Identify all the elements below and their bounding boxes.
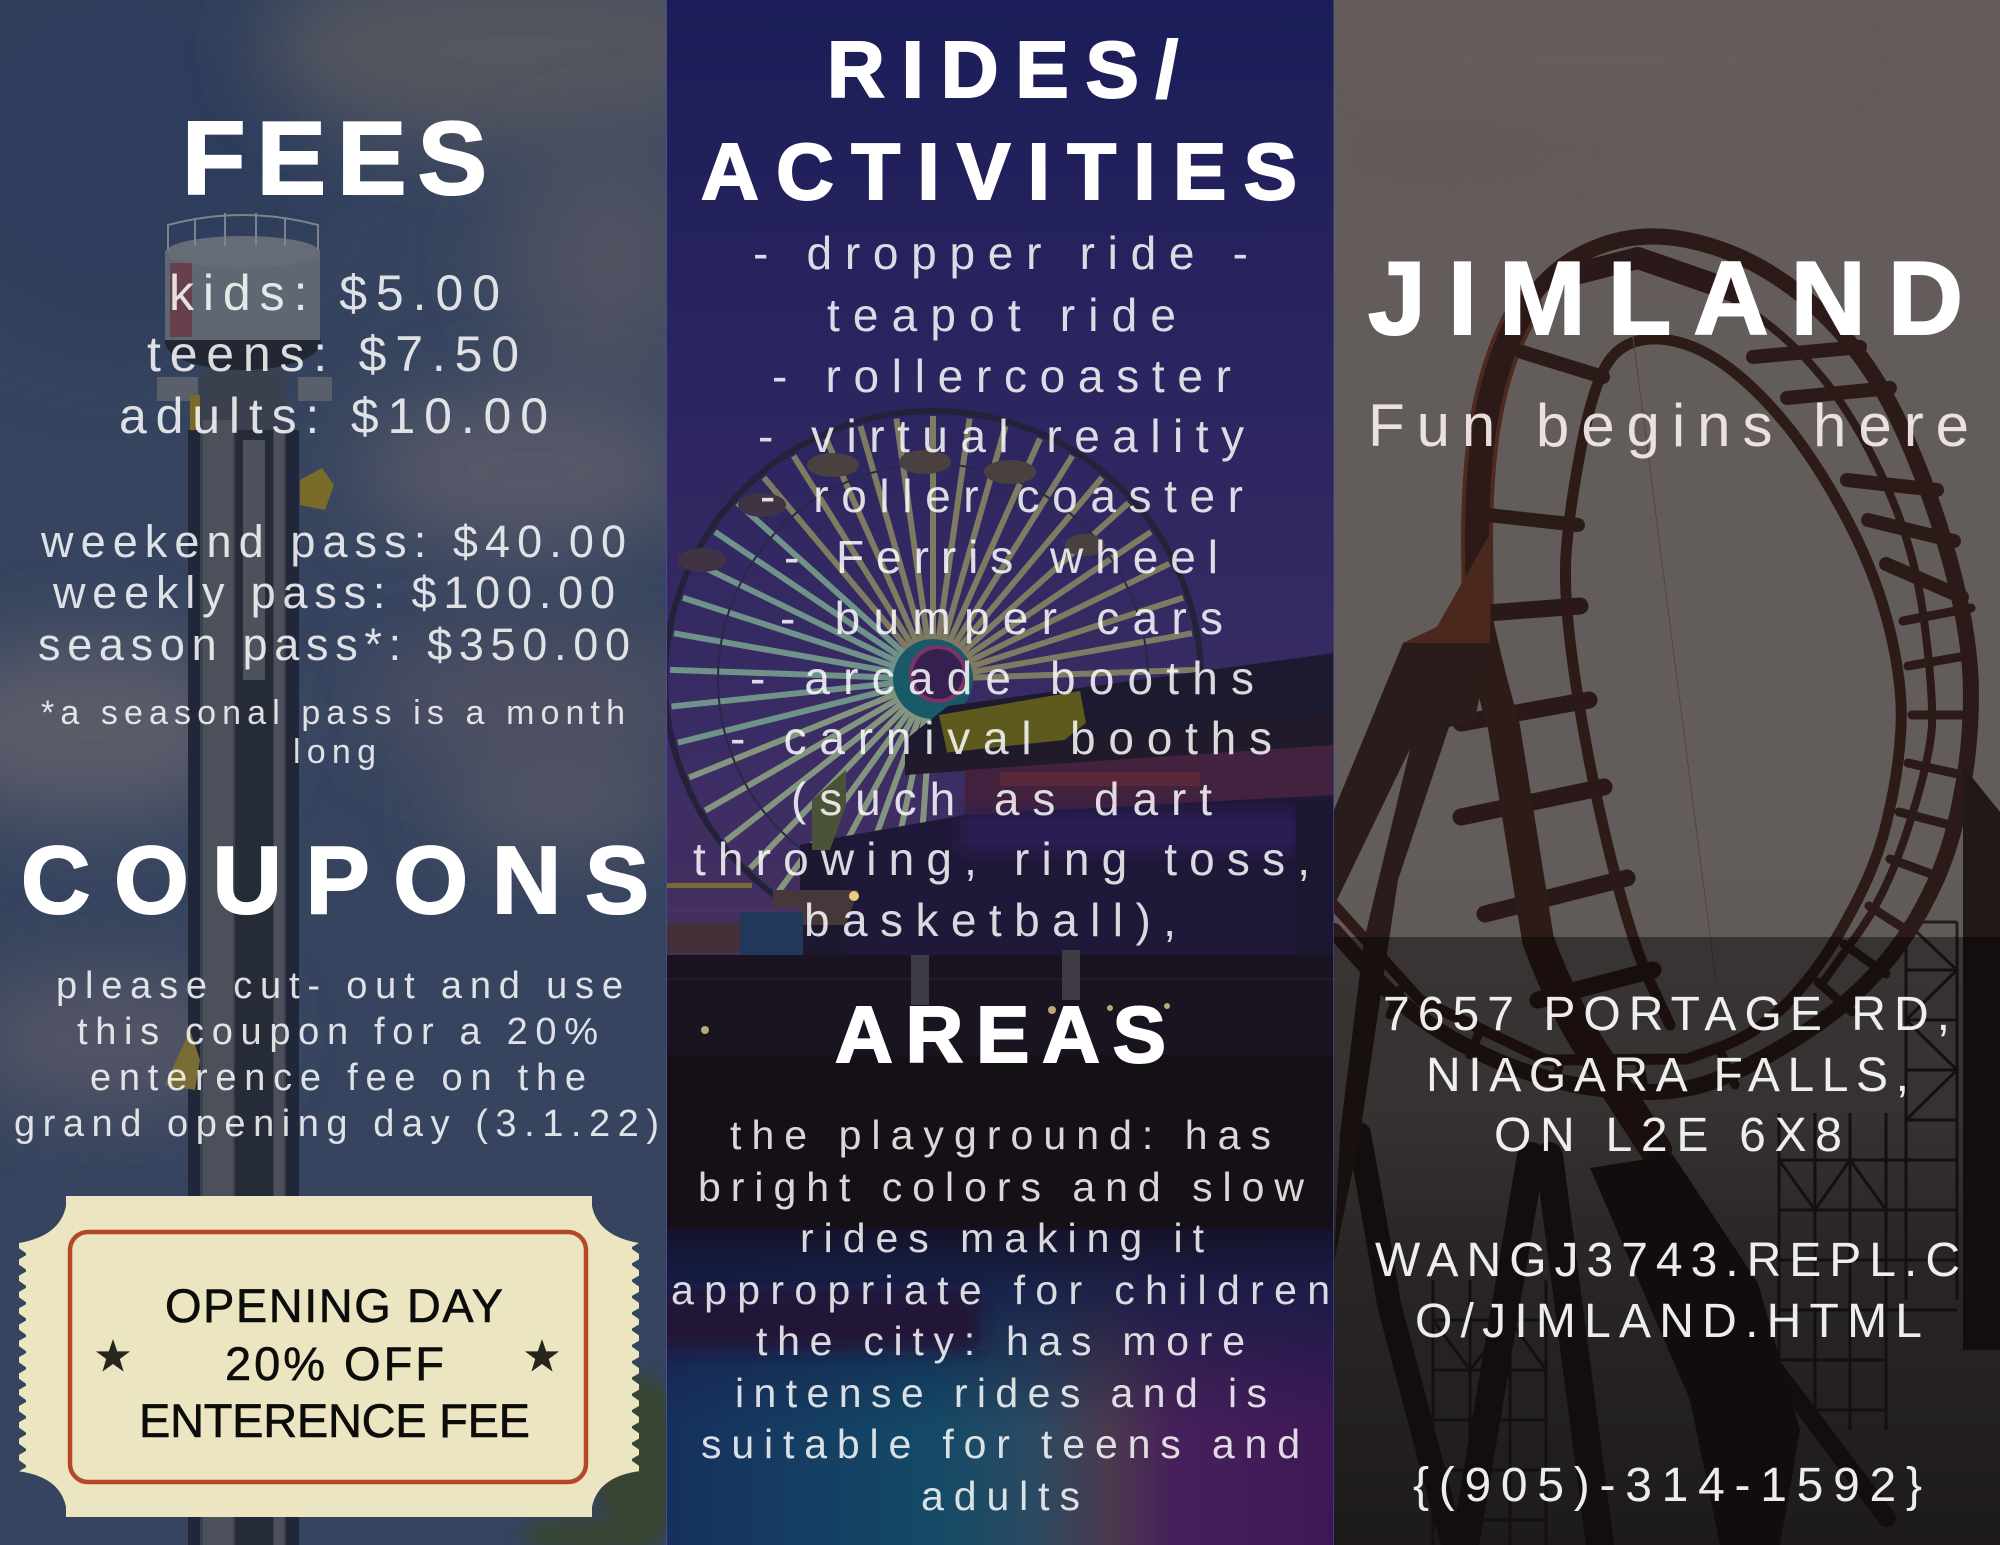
heading: areas: AREAS: [835, 990, 1166, 1079]
coupon text: [139, 1279, 530, 1447]
pass prices: weekly pass: $100.00: [52, 567, 615, 618]
admission prices: adults: $10.00: [119, 388, 548, 444]
heading: rides / activities: [701, 25, 1297, 216]
website: WANGJ3743.REPL.C: [1375, 1234, 1960, 1287]
divider: [666, 0, 668, 1545]
pass prices: weekend pass: $40.00: [40, 516, 626, 567]
footnote: seasonal pass: [41, 694, 625, 771]
icon: right star: [525, 1339, 559, 1372]
divider: [1333, 0, 1335, 1545]
pass prices: [38, 516, 630, 670]
list of rides and activities: - carnival booths: [730, 712, 1272, 764]
areas description: suitable for teens and: [701, 1421, 1300, 1467]
list of rides and activities: - arcade booths: [750, 652, 1254, 704]
list of rides and activities: - dropper ride -: [753, 227, 1248, 279]
address: [1383, 988, 1950, 1162]
list of rides and activities: - Ferris wheel: [784, 531, 1218, 583]
coupon ticket: [19, 1196, 639, 1517]
address: ON L2E 6X8: [1494, 1109, 1842, 1162]
areas description: rides making it: [800, 1215, 1205, 1261]
areas description: intense rides and is: [735, 1370, 1267, 1416]
panel: jimland title and contact: [1334, 0, 2000, 1545]
address: 7657 PORTAGE RD,: [1383, 988, 1950, 1041]
photo background: ferris wheel on a pier at dusk: [600, 0, 1334, 1545]
coupon description: [14, 965, 659, 1145]
list of rides and activities: teapot ride: [827, 289, 1176, 341]
list of rides and activities: basketball),: [804, 894, 1176, 946]
photo background: roller coaster loop silhouette: [1334, 0, 2000, 1545]
tagline: Fun begins here: [1368, 392, 1969, 459]
phone number: {(905)-314-1592}: [1413, 1459, 1922, 1512]
footnote: seasonal pass: *a seasonal pass is a month: [41, 694, 625, 732]
photo background: drop tower against cloudy sky: [0, 0, 666, 1545]
website: O/JIMLAND.HTML: [1415, 1295, 1922, 1348]
website: [1375, 1234, 1960, 1348]
pass prices: season pass*: $350.00: [38, 619, 630, 670]
list of rides and activities: - roller coaster: [760, 470, 1243, 522]
coupon description: enterence fee on the: [90, 1057, 586, 1099]
list of rides and activities: throwing, ring toss,: [693, 833, 1310, 885]
admission prices: kids: $5.00: [169, 265, 500, 321]
icon: left star: [96, 1339, 130, 1372]
admission prices: teens: $7.50: [147, 326, 519, 382]
list of rides and activities: - virtual reality: [758, 410, 1244, 462]
list of rides and activities: - bumper cars: [780, 592, 1223, 644]
coupon text: 20% OFF: [225, 1337, 444, 1390]
list of rides and activities: (such as dart: [791, 773, 1212, 825]
list of rides and activities: [693, 227, 1310, 946]
address: NIAGARA FALLS,: [1426, 1049, 1909, 1102]
coupon description: grand opening day (3.1.22): [14, 1103, 659, 1145]
coupon text: OPENING DAY: [165, 1279, 503, 1332]
footnote: seasonal pass: long: [293, 733, 376, 771]
coupon description: please cut- out and use: [56, 965, 623, 1007]
panel: rides, activities and areas: [600, 0, 1334, 1545]
areas description: bright colors and slow: [698, 1164, 1304, 1210]
dark band behind contact details: [1334, 937, 2000, 1545]
admission prices: [119, 265, 548, 444]
loop structure: [1334, 236, 1971, 1545]
coupon description: this coupon for a 20%: [77, 1011, 598, 1053]
areas description: the playground: has: [730, 1112, 1271, 1158]
areas description: the city: has more: [756, 1318, 1245, 1364]
heading: rides / activities: RIDES/: [827, 25, 1178, 114]
title: jimland: JIMLAND: [1368, 241, 1963, 357]
areas description: [671, 1112, 1330, 1519]
areas description: adults: [921, 1473, 1080, 1519]
list of rides and activities: - rollercoaster: [772, 350, 1231, 402]
areas description: appropriate for children: [671, 1267, 1330, 1313]
heading: fees: FEES: [182, 101, 487, 217]
heading: coupons: COUPONS: [21, 827, 649, 934]
panel: fees and coupons: [0, 0, 666, 1545]
scaffolding: [1433, 922, 1957, 1545]
heading: rides / activities: ACTIVITIES: [701, 127, 1297, 216]
coupon text: ENTERENCE FEE: [139, 1394, 530, 1447]
